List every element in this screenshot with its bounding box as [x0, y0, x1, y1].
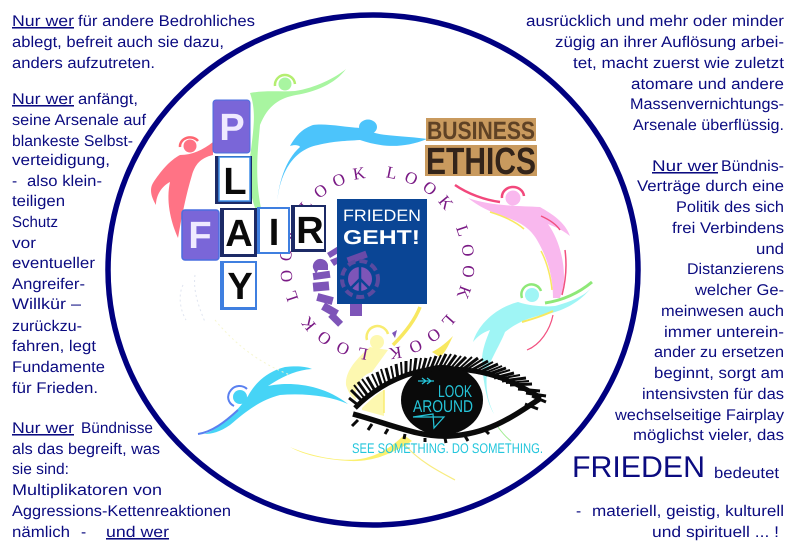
figure: pink person: [455, 185, 570, 298]
paragraph: auflösung: Arsenale überflüssig.: [633, 117, 784, 134]
cube I: [257, 207, 290, 254]
paragraph: nur wer ablegt: [12, 13, 255, 72]
paragraph: nur wer anfängt: Angreifer-: [12, 276, 85, 293]
paragraph: nur wer anfängt: Nur wer: [12, 91, 74, 108]
paragraph: nur wer anfängt: -: [12, 173, 17, 190]
paragraph: nur wer bündnis-verträge: welcher Ge-: [694, 282, 784, 299]
paragraph: nur wer bündnis-verträge: Politik des sich: [676, 199, 784, 216]
paragraph: nur wer bündnis-verträge: Verträge durch eine: [637, 178, 784, 195]
paragraph: nur wer bündnisse: nämlich: [12, 524, 70, 541]
paragraph: closing line: und spirituell ... !: [652, 524, 779, 541]
text block: left column: [12, 13, 255, 541]
paragraph: nur wer bündnisse: und wer: [106, 524, 169, 541]
paragraph: nur wer anfängt: Schutz: [12, 214, 58, 231]
paragraph: auflösung: ausrücklich und mehr oder minder: [526, 13, 784, 30]
heading: frieden: FRIEDEN: [572, 451, 705, 484]
paragraph: nur wer bündnis-verträge: möglichst vieler, das: [633, 427, 784, 444]
cube F: [182, 210, 219, 260]
paragraph: auflösung: zügig an ihrer Auflösung arbei-: [555, 34, 784, 51]
paragraph: nur wer anfängt: für Frieden.: [12, 380, 98, 397]
paragraph: nur wer ablegt: Nur wer: [12, 13, 74, 30]
cube Y: Y: [227, 266, 253, 308]
paragraph: nur wer bündnis-verträge: meinwesen auch: [661, 303, 784, 320]
look around text: AROUND: [413, 397, 473, 416]
look around text: [413, 382, 473, 416]
panel: central circle: [108, 15, 638, 525]
panel: business ethics wood type: ETHICS: [426, 141, 536, 183]
paragraph: nur wer anfängt: zurückzu-: [12, 318, 82, 335]
paragraph: nur wer bündnisse: Nur wer: [12, 420, 74, 437]
paragraph: nur wer bündnis-verträge: Nur wer: [652, 158, 718, 175]
figure: cyan person: [473, 282, 592, 441]
paragraph: nur wer bündnisse: [12, 420, 231, 541]
eye arrows: [413, 378, 444, 428]
paragraph: nur wer ablegt: anders aufzutreten.: [12, 55, 155, 72]
paragraph: closing line: materiell, geistig, kulturell: [592, 503, 784, 520]
paragraph: nur wer anfängt: Fundamente: [12, 359, 105, 376]
cube L: [215, 156, 252, 204]
panel: frieden geht logo: FRIEDEN: [343, 207, 421, 225]
cube A: A: [225, 213, 253, 255]
look around text: LOOK: [438, 382, 472, 401]
paragraph: nur wer anfängt: teiligen: [12, 193, 65, 210]
paragraph: nur wer bündnis-verträge: immer unterein-: [664, 324, 784, 341]
paragraph: nur wer bündnisse: -: [81, 524, 86, 541]
cube A: [220, 208, 257, 257]
figure: green person: [249, 69, 346, 232]
paragraph: auflösung: Massenvernichtungs-: [630, 96, 784, 113]
cube Y: [220, 261, 257, 310]
eye iris: [401, 365, 483, 435]
figure: blue person: [277, 120, 427, 205]
heading: frieden: [572, 451, 780, 484]
paragraph: nur wer bündnis-verträge: [614, 158, 784, 444]
eye lids: [349, 354, 546, 443]
heading: frieden: bedeutet: [714, 465, 780, 482]
paragraph: nur wer bündnisse: sie sind:: [12, 461, 69, 478]
purple footprint marks: [313, 245, 343, 327]
paragraph: nur wer anfängt: also klein-: [27, 173, 102, 190]
paragraph: nur wer anfängt: Willkür –: [12, 296, 81, 313]
text block: right column: [526, 13, 785, 541]
paragraph: nur wer bündnisse: Bündnisse: [81, 420, 153, 437]
see something caption: SEE SOMETHING. DO SOMETHING.: [352, 440, 543, 456]
paragraph: auflösung: [526, 13, 785, 134]
paragraph: nur wer bündnis-verträge: Bündnis-: [721, 158, 784, 175]
paragraph: nur wer anfängt: fahren, legt: [12, 338, 97, 355]
fair play letter cubes: [182, 100, 326, 310]
panel: frieden geht logo: GEHT!: [343, 227, 420, 249]
paragraph: nur wer anfängt: eventueller: [12, 255, 95, 272]
panel: business ethics wood type: BUSINESS: [427, 117, 535, 145]
paragraph: auflösung: tet, macht zuerst wie zuletzt: [573, 55, 785, 72]
paragraph: nur wer ablegt: ablegt, befreit auch sie dazu,: [12, 34, 224, 51]
figure: yellow person: [290, 307, 455, 480]
paragraph: nur wer bündnisse: als das begreift, was: [12, 441, 160, 458]
paragraph: nur wer anfängt: anfängt,: [78, 91, 138, 108]
figure: light blue swimmer: [198, 366, 348, 434]
cube R: R: [296, 210, 324, 252]
paragraph: nur wer bündnis-verträge: wechselseitige Fairplay: [614, 407, 784, 424]
paragraph: auflösung: atomare und andere: [631, 76, 784, 93]
figure: red person: [151, 137, 213, 238]
paragraph: nur wer bündnisse: Aggressions-Kettenreaktionen: [12, 503, 231, 520]
paragraph: nur wer bündnis-verträge: und: [756, 241, 784, 258]
paragraph: nur wer anfängt: blankeste Selbst-: [12, 133, 133, 150]
icon: peace sign: [342, 251, 378, 316]
paragraph: nur wer bündnis-verträge: intensivsten für das: [642, 386, 784, 403]
paragraph: nur wer anfängt: seine Arsenale auf: [12, 112, 147, 129]
paragraph: nur wer anfängt: [12, 91, 147, 397]
panel: frieden geht logo: [337, 199, 427, 316]
paragraph: closing line: [576, 503, 784, 541]
paragraph: nur wer ablegt: für andere Bedrohliches: [78, 13, 255, 30]
paragraph: nur wer bündnis-verträge: beginnt, sorgt am: [654, 365, 784, 382]
paragraph: nur wer anfängt: verteidigung,: [12, 152, 110, 169]
paragraph: nur wer bündnis-verträge: frei Verbindens: [672, 220, 784, 237]
look look circular text: LOOK LOOK LOOK LOOK LOOK LOOK: [280, 166, 474, 360]
paragraph: nur wer bündnis-verträge: Distanzierens: [687, 261, 784, 278]
figure: faint ghost person: [180, 275, 290, 375]
paragraph: nur wer bündnis-verträge: ander zu ersetzen: [654, 344, 784, 361]
cube P: P: [219, 107, 245, 149]
paragraph: nur wer anfängt: vor: [12, 235, 36, 252]
cube F: F: [188, 215, 212, 257]
cube P: [213, 100, 250, 153]
icon: eye look around: [349, 354, 546, 456]
paragraph: closing line: -: [576, 503, 581, 520]
paragraph: nur wer bündnisse: Multiplikatoren von: [12, 482, 162, 499]
cube L: L: [223, 161, 247, 203]
cube I: I: [269, 212, 279, 254]
panel: business ethics wood type: [425, 117, 537, 183]
